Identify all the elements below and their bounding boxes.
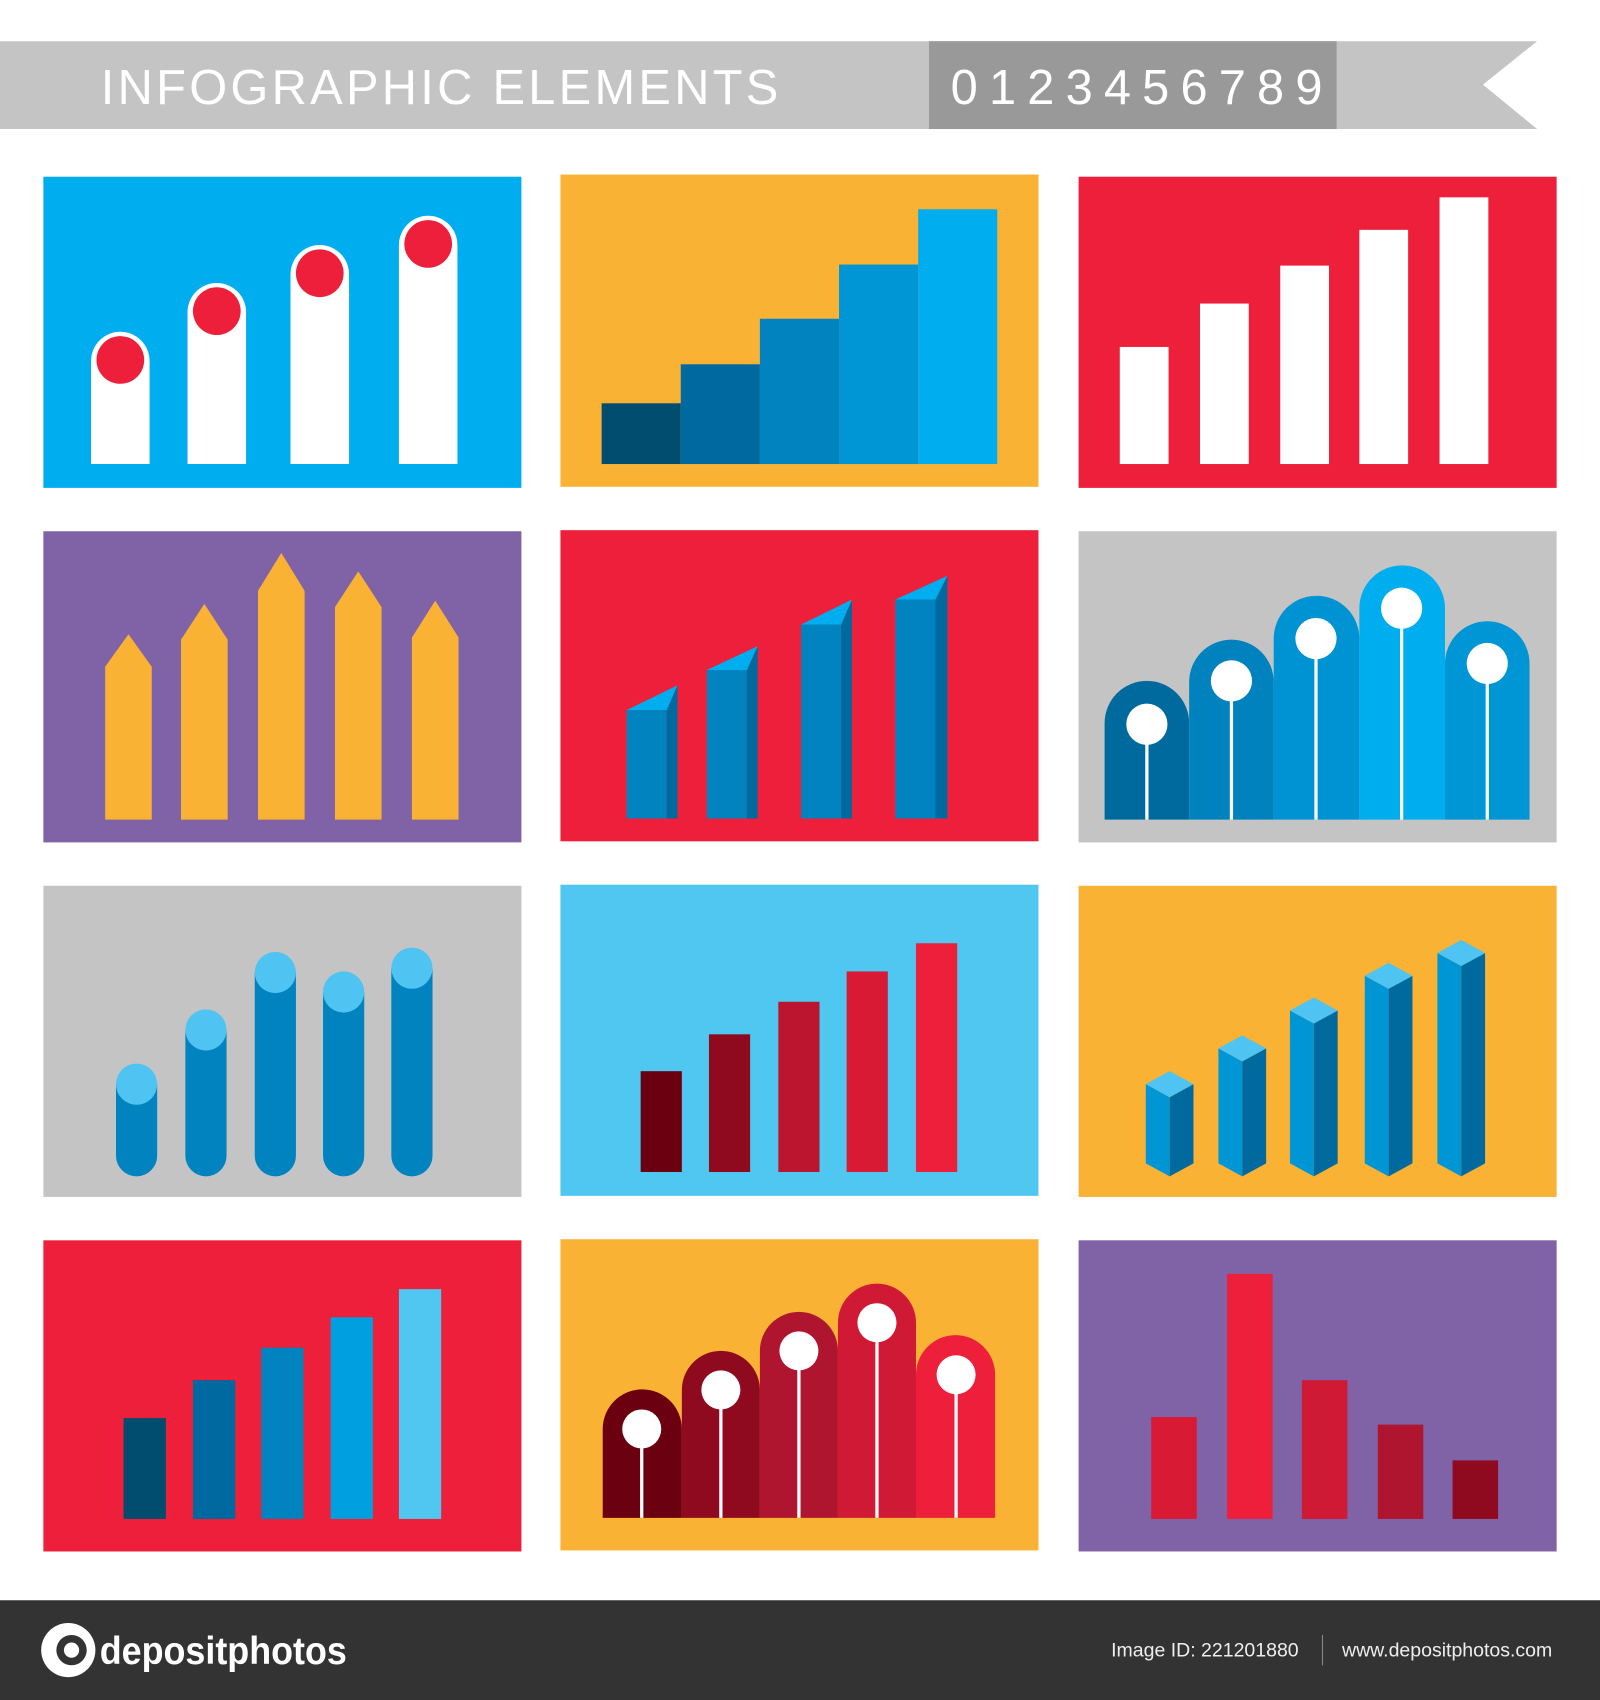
panel: red with 3D blue bars	[560, 530, 1038, 841]
panel: orange with red arches and pins	[560, 1239, 1038, 1550]
panel: orange staircase	[560, 175, 1038, 487]
panel: gray with blue arches and pins	[1079, 531, 1557, 842]
header banner	[0, 41, 1537, 129]
website: www.depositphotos.com	[1341, 1640, 1552, 1662]
panel: red with blue gradient bars	[43, 1240, 521, 1551]
numbers: 0123456789	[951, 61, 1322, 115]
icon: logo	[41, 1623, 95, 1677]
panel: red with white bars	[1079, 177, 1557, 488]
title: INFOGRAPHIC ELEMENTS	[101, 61, 778, 115]
image id: Image ID: 221201880	[1111, 1640, 1299, 1662]
logo text: depositphotos	[100, 1630, 347, 1673]
footer	[0, 1600, 1600, 1700]
panel: orange with isometric prisms	[1079, 886, 1557, 1197]
panel: light blue with red bars	[560, 885, 1038, 1196]
panel: purple with red bars	[1079, 1240, 1557, 1551]
panel: purple with yellow arrows	[43, 531, 521, 842]
panel: gray with cylinders	[43, 886, 521, 1197]
panel: blue with white rounded bars and red dots	[43, 177, 521, 488]
